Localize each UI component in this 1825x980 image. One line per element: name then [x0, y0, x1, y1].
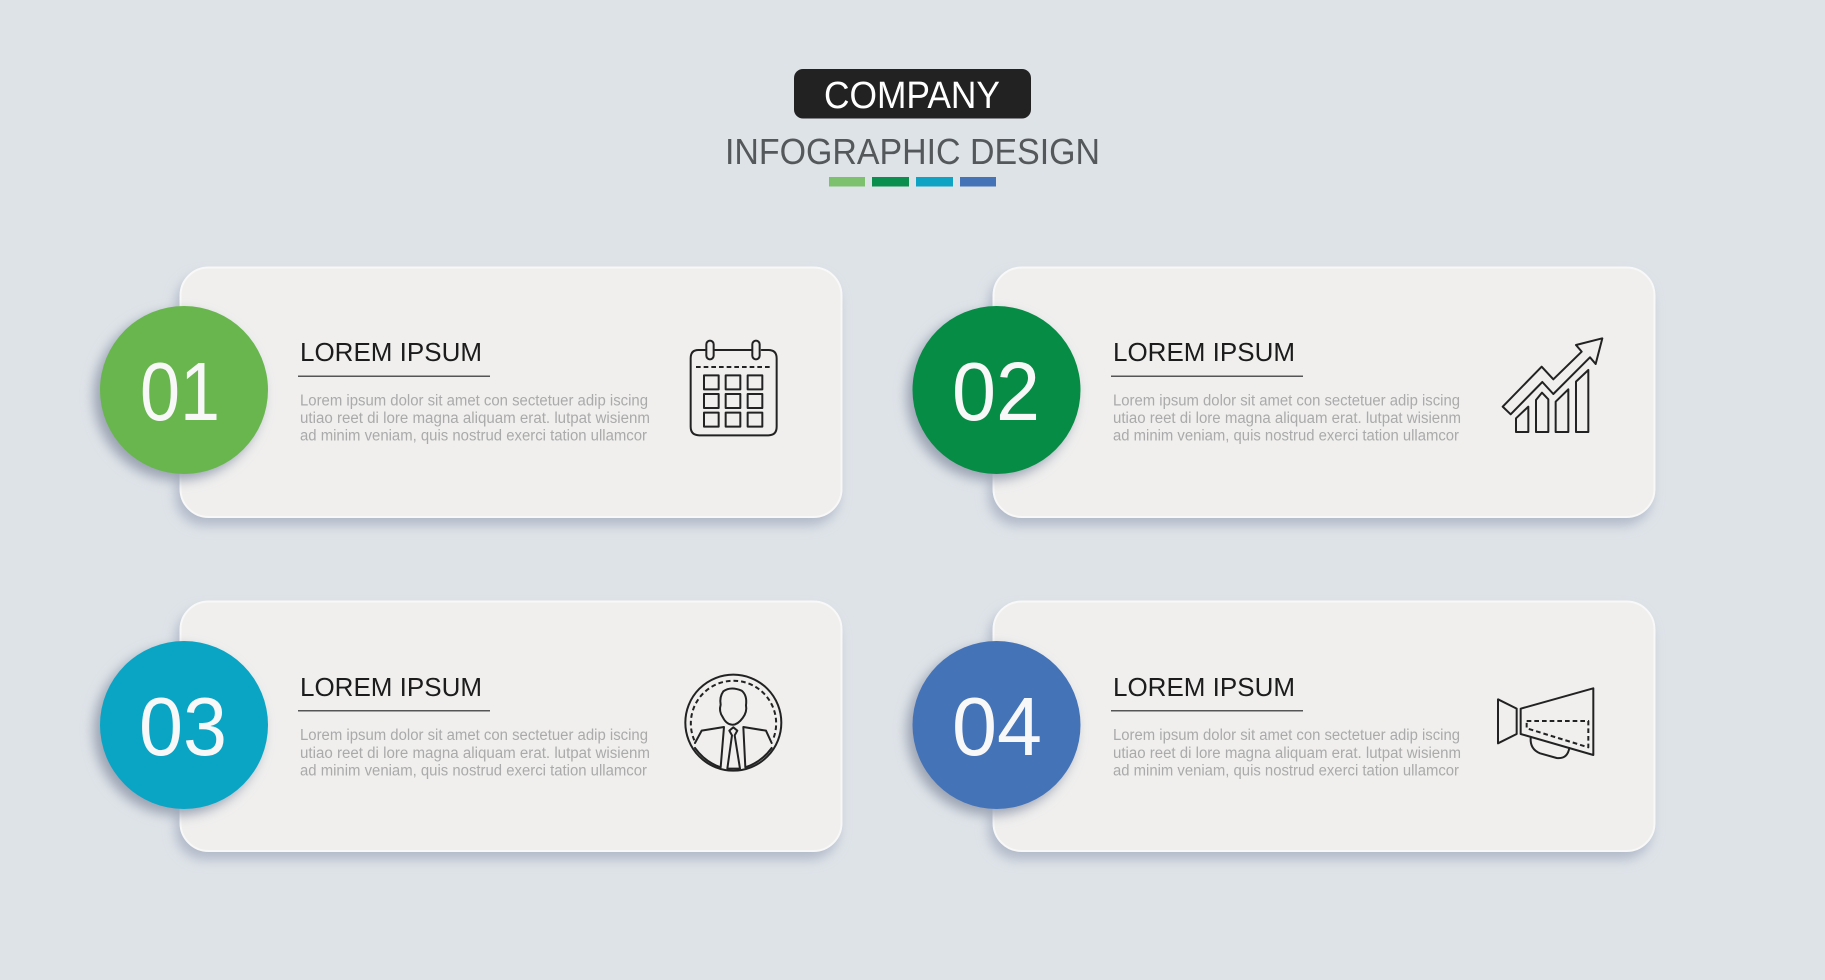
number circle	[907, 641, 1080, 815]
body text: ad minim veniam, quis nostrud exerci tation ullamcor	[300, 762, 647, 780]
body text: utiao reet di lore magna aliquam erat. lutpat wisienm	[1113, 410, 1461, 427]
card	[176, 268, 842, 525]
heading: LOREM IPSUM	[300, 337, 482, 367]
body text: ad minim veniam, quis nostrud exerci tation ullamcor	[1113, 762, 1459, 780]
card	[989, 602, 1654, 859]
panel: 04	[907, 602, 1654, 859]
panel: 03	[94, 602, 842, 859]
body text: ad minim veniam, quis nostrud exerci tation ullamcor	[300, 428, 647, 444]
icon: businessperson	[685, 675, 781, 771]
panel: 02	[907, 268, 1654, 525]
heading: LOREM IPSUM	[300, 672, 482, 702]
heading: LOREM IPSUM	[1113, 337, 1295, 367]
body text: utiao reet di lore magna aliquam erat. lutpat wisienm	[300, 410, 650, 427]
icon: calendar	[691, 341, 777, 435]
heading rule	[298, 376, 490, 377]
body text: Lorem ipsum dolor sit amet con sectetuer adip iscing	[1113, 727, 1460, 744]
number circle	[94, 306, 268, 480]
body text: Lorem ipsum dolor sit amet con sectetuer adip iscing	[300, 392, 648, 410]
card	[176, 602, 842, 859]
body text: utiao reet di lore magna aliquam erat. lutpat wisienm	[300, 745, 650, 762]
number circle: 02	[952, 345, 1040, 438]
number circle	[94, 641, 268, 815]
body text	[300, 727, 650, 780]
company badge: COMPANY	[824, 75, 1000, 117]
body text	[1113, 727, 1461, 780]
body text: ad minim veniam, quis nostrud exerci tation ullamcor	[1113, 428, 1459, 444]
number circle	[907, 306, 1080, 480]
number circle: 01	[140, 345, 220, 438]
icon: megaphone	[1498, 688, 1593, 758]
panel: 01	[94, 268, 842, 525]
heading rule	[1111, 376, 1303, 377]
number circle: 04	[952, 680, 1042, 773]
header	[725, 69, 1100, 186]
icon: growth chart	[1503, 338, 1602, 432]
company badge	[794, 69, 1031, 118]
body text: Lorem ipsum dolor sit amet con sectetuer adip iscing	[300, 727, 648, 744]
heading: LOREM IPSUM	[1113, 672, 1295, 702]
heading rule	[1111, 710, 1303, 712]
colour key bars	[829, 177, 996, 186]
body text	[300, 392, 650, 444]
body text: utiao reet di lore magna aliquam erat. lutpat wisienm	[1113, 745, 1461, 762]
card	[989, 268, 1654, 525]
body text	[1113, 392, 1461, 444]
heading rule	[298, 710, 490, 712]
title: INFOGRAPHIC DESIGN	[725, 131, 1100, 172]
number circle: 03	[139, 680, 227, 773]
body text: Lorem ipsum dolor sit amet con sectetuer adip iscing	[1113, 392, 1460, 410]
